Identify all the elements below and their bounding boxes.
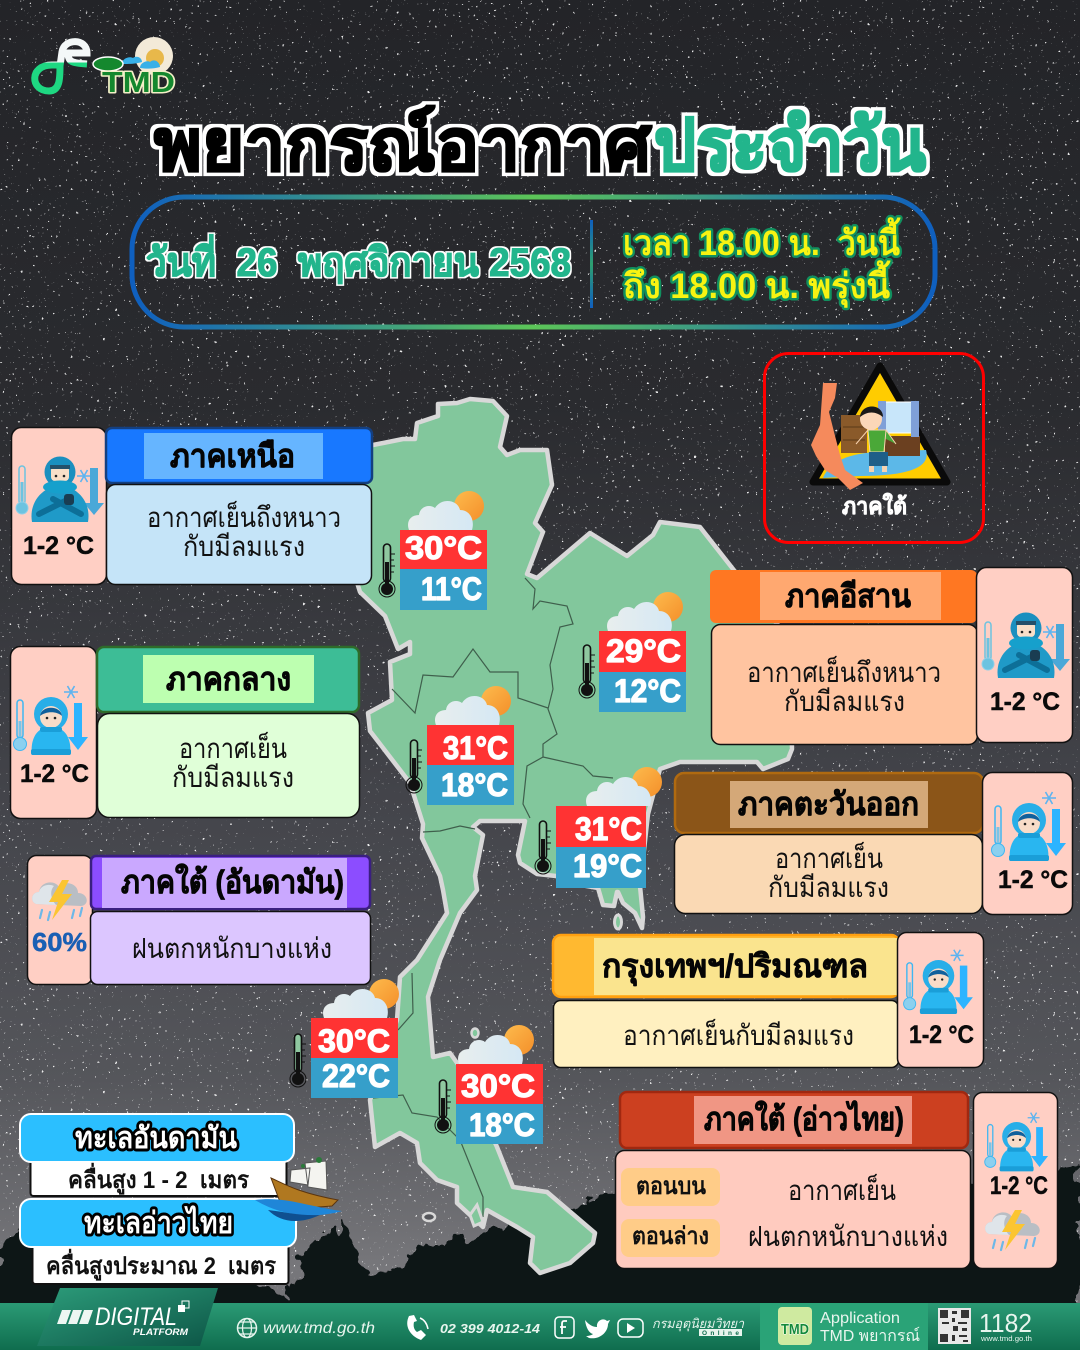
panel: Gulf sea: [20, 1199, 296, 1284]
panel: south Andaman: [28, 856, 370, 984]
panel: central: [10, 646, 360, 818]
panel: north: [12, 428, 372, 584]
panel: south Andaman: ภาคใต้ (อันดามัน): [121, 863, 344, 900]
panel: central: ภาคกลาง: [166, 661, 291, 697]
panel: northeast: [710, 568, 1072, 744]
logo: department and TMD: TMD: [102, 67, 175, 99]
panel: central: 1-2 °C: [20, 760, 89, 788]
panel: north: 1-2 °C: [23, 532, 94, 560]
panel: east: 1-2 °C: [998, 866, 1068, 894]
panel: Gulf sea: ทะเลอ่าวไทย: [84, 1205, 233, 1240]
hotline 1182: 1182: [979, 1308, 1032, 1338]
panel: Bangkok and vicinity: [553, 932, 984, 1068]
panel: south Gulf of Thailand: อากาศเย็น: [788, 1173, 896, 1206]
department name: Online: [702, 1330, 739, 1337]
panel: northeast: ภาคอีสาน: [785, 578, 911, 614]
icon: ship: [255, 1157, 342, 1221]
northeast temperatures: 12°C: [614, 673, 681, 709]
date and time frame: [132, 197, 935, 327]
hotline 1182: www.tmd.go.th: [980, 1336, 1032, 1343]
title: [154, 105, 926, 186]
label: upper part: [621, 1168, 720, 1206]
panel: south Gulf of Thailand: ฝนตกหนักบางแห่ง: [748, 1221, 948, 1252]
digital platform badge: DIGITAL: [95, 1303, 177, 1331]
south Andaman temperatures: 30°C: [318, 1023, 390, 1059]
south Gulf temperatures: 30°C: [461, 1068, 535, 1104]
panel: northeast: กับมีลมแรง: [784, 686, 905, 717]
digital platform badge: PLATFORM: [133, 1327, 189, 1338]
panel: Andaman sea: คลื่นสูง 1 - 2 เมตร: [68, 1162, 249, 1195]
panel: Bangkok and vicinity: 1-2 °C: [909, 1021, 974, 1049]
icon: TMD sun and clouds: [93, 37, 173, 75]
panel: Bangkok and vicinity: กรุงเทพฯ/ปริมณฑล: [602, 948, 868, 987]
panel: central: กับมีลมแรง: [172, 762, 294, 793]
department name: [652, 1316, 745, 1337]
south Andaman temperatures: 22°C: [322, 1058, 390, 1094]
panel: east: อากาศเย็น: [775, 841, 883, 874]
panel: northeast: 1-2 °C: [990, 688, 1060, 716]
QR code: [938, 1308, 971, 1344]
panel: central: อากาศเย็น: [179, 731, 287, 764]
label: upper part: ตอนบน: [636, 1173, 707, 1200]
label: lower part: ตอนล่าง: [632, 1223, 709, 1250]
phone: [407, 1315, 541, 1340]
application block: Application: [820, 1310, 900, 1327]
northeast temperatures: [579, 592, 686, 712]
digital platform badge: [37, 1288, 218, 1346]
logo: department and TMD: [35, 37, 175, 99]
panel: Andaman sea: ทะเลอันดามัน: [75, 1122, 237, 1155]
application block: [760, 1303, 928, 1350]
central temperatures: 18°C: [441, 767, 508, 803]
icon: warning triangle with flooded room: [813, 366, 947, 482]
panel: east: กับมีลมแรง: [768, 872, 889, 903]
panel: north: ภาคเหนือ: [170, 438, 295, 474]
forecast time start: เวลา 18.00 น. วันนี้: [623, 217, 901, 263]
northeast temperatures: 29°C: [606, 633, 681, 669]
panel: east: [674, 772, 1072, 914]
panel: warning south flood: [764, 354, 984, 542]
date: วันที่ 26 พฤศจิกายน 2568: [146, 234, 571, 285]
map of Thailand: [350, 399, 792, 1273]
panel: south Gulf of Thailand: [616, 1092, 1058, 1268]
panel: warning south flood: ภาคใต้: [842, 492, 907, 519]
north temperatures: [379, 491, 487, 610]
central temperatures: 31°C: [443, 730, 508, 766]
icon: south Thailand map: [811, 383, 863, 490]
north temperatures: 30°C: [405, 530, 482, 566]
panel: south Gulf of Thailand: 1-2 °C: [990, 1172, 1048, 1200]
panel: south Andaman: ฝนตกหนักบางแห่ง: [132, 933, 332, 964]
east temperatures: 19°C: [573, 848, 642, 884]
department name: กรมอุตุนิยมวิทยา: [652, 1316, 745, 1332]
east temperatures: [535, 767, 662, 888]
panel: north: กับมีลมแรง: [183, 531, 305, 562]
panel: northeast: อากาศเย็นถึงหนาว: [747, 655, 941, 688]
title: พยากรณ์อากาศ: [154, 105, 652, 186]
label: lower part: [621, 1219, 720, 1257]
panel: south Andaman: 60%: [32, 927, 87, 957]
panel: east: ภาคตะวันออก: [738, 786, 919, 822]
panel: Andaman sea: [20, 1114, 294, 1196]
phone: 02 399 4012-14: [440, 1321, 541, 1336]
south Gulf temperatures: [435, 1025, 543, 1144]
title: ประจำวัน: [654, 106, 926, 186]
social icons: [555, 1317, 643, 1338]
panel: Gulf sea: คลื่นสูงประมาณ 2 เมตร: [46, 1248, 276, 1281]
panel: north: อากาศเย็นถึงหนาว: [147, 500, 341, 533]
panel: south Gulf of Thailand: ภาคใต้ (อ่าวไทย): [704, 1100, 904, 1137]
application block: TMD พยากรณ์: [820, 1326, 920, 1345]
application block: TMD: [781, 1321, 809, 1338]
website: www.tmd.go.th: [263, 1320, 375, 1337]
south Gulf temperatures: 18°C: [469, 1107, 535, 1143]
forecast time end: ถึง 18.00 น. พรุ่งนี้: [623, 260, 891, 308]
central temperatures: [406, 686, 514, 805]
north temperatures: 11°C: [421, 571, 482, 607]
south Andaman temperatures: [290, 979, 399, 1098]
panel: Bangkok and vicinity: อากาศเย็นกับมีลมแรง: [623, 1018, 854, 1051]
east temperatures: 31°C: [575, 811, 642, 847]
icon: department mark: [35, 42, 87, 91]
website: [238, 1318, 375, 1338]
footer: [0, 1288, 1080, 1350]
